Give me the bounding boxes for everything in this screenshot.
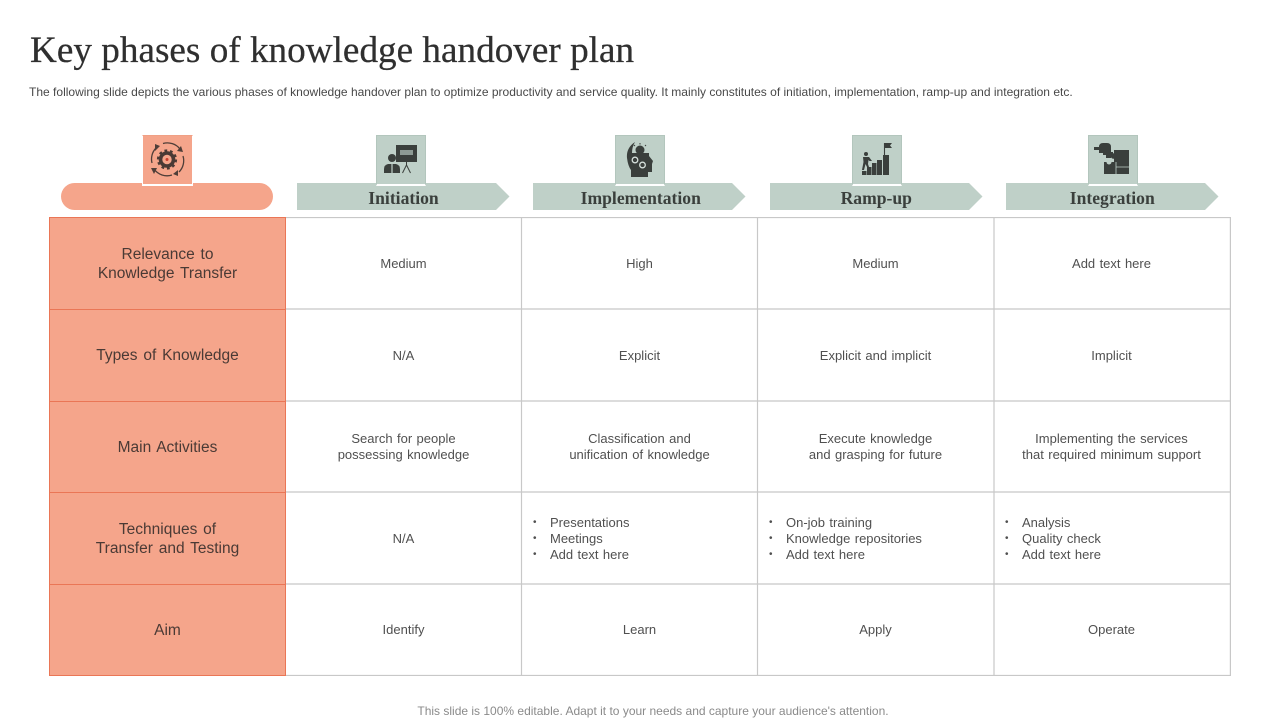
techniques: integration: Quality check <box>1022 530 1101 546</box>
activities: ramp-up: and grasping for future <box>809 447 942 462</box>
activities: initiation: possessing knowledge <box>338 447 469 462</box>
row header: techniques: Transfer and Testing <box>96 540 239 556</box>
types: implementation: Explicit <box>619 348 660 362</box>
activities: integration: that required minimum support <box>1022 447 1201 462</box>
header pill: row labels <box>61 183 273 210</box>
row header: aim: Aim <box>154 622 181 638</box>
comparison table <box>286 217 1231 676</box>
row header: types <box>49 309 286 402</box>
icon: presenter with board <box>376 135 426 186</box>
relevance: initiation: Medium <box>380 256 427 270</box>
types: ramp-up: Explicit and implicit <box>820 348 931 362</box>
techniques: implementation <box>533 514 630 562</box>
row header: relevance: Relevance to <box>122 246 213 262</box>
icon: climbing steps to flag <box>852 135 902 186</box>
activities: initiation: Search for people <box>351 431 456 446</box>
icon: rotating gear <box>142 135 193 186</box>
activities: initiation <box>338 431 469 462</box>
techniques: implementation: Add text here <box>550 546 629 562</box>
relevance: integration: Add text here <box>1072 256 1151 270</box>
types: initiation: N/A <box>393 348 414 362</box>
subtitle description: The following slide depicts the various phases of knowledge handover plan to optimize productivity and service quality. It mainly constitutes of initiation, implementation, ramp-up and integration etc. <box>29 85 1073 99</box>
row header: relevance: Knowledge Transfer <box>98 264 237 282</box>
techniques: ramp-up: Add text here <box>786 546 865 562</box>
aim: ramp-up: Apply <box>859 622 892 637</box>
activities: implementation: Classification and <box>588 431 691 446</box>
techniques: implementation: Presentations <box>550 514 630 530</box>
row header: techniques <box>49 492 286 585</box>
relevance: ramp-up: Medium <box>852 256 899 270</box>
activities: implementation: unification of knowledge <box>569 447 710 462</box>
phase header: integration: Integration <box>1070 188 1155 208</box>
icon: head with gears <box>615 135 665 186</box>
phase header: implementation: Implementation <box>581 188 701 208</box>
activities: integration <box>1022 431 1201 462</box>
icon: jigsaw pieces <box>1088 135 1138 186</box>
techniques: integration <box>1005 514 1101 562</box>
phase header: implementation <box>533 183 746 210</box>
phase header: initiation <box>297 183 510 210</box>
techniques: ramp-up: Knowledge repositories <box>786 530 922 546</box>
footer note: This slide is 100% editable. Adapt it to your needs and capture your audience's attention. <box>417 704 889 718</box>
types: integration: Implicit <box>1091 348 1132 362</box>
phase header: ramp-up <box>770 183 982 210</box>
aim: implementation: Learn <box>623 622 656 637</box>
activities: ramp-up: Execute knowledge <box>819 431 932 446</box>
row header: types: Types of Knowledge <box>96 347 239 364</box>
activities: ramp-up <box>809 431 942 462</box>
phase header: integration <box>1006 183 1218 210</box>
activities: implementation <box>569 431 710 462</box>
phase header: initiation: Initiation <box>368 188 439 208</box>
row header: relevance <box>49 217 286 310</box>
techniques: ramp-up <box>769 514 922 562</box>
aim: initiation: Identify <box>383 622 424 637</box>
row header: activities <box>49 401 286 493</box>
row header: activities: Main Activities <box>118 438 217 456</box>
row header: aim <box>49 584 286 676</box>
techniques: integration: Analysis <box>1022 514 1070 530</box>
techniques: initiation: N/A <box>393 530 414 546</box>
aim: integration: Operate <box>1088 622 1135 637</box>
relevance: implementation: High <box>626 256 653 270</box>
activities: integration: Implementing the services <box>1035 431 1188 446</box>
phase header: ramp-up: Ramp-up <box>841 188 912 208</box>
title: Key phases of knowledge handover plan <box>30 30 634 71</box>
techniques: ramp-up: On-job training <box>786 514 872 530</box>
techniques: integration: Add text here <box>1022 546 1101 562</box>
techniques: implementation: Meetings <box>550 530 603 546</box>
row header: techniques: Techniques of <box>119 520 216 538</box>
